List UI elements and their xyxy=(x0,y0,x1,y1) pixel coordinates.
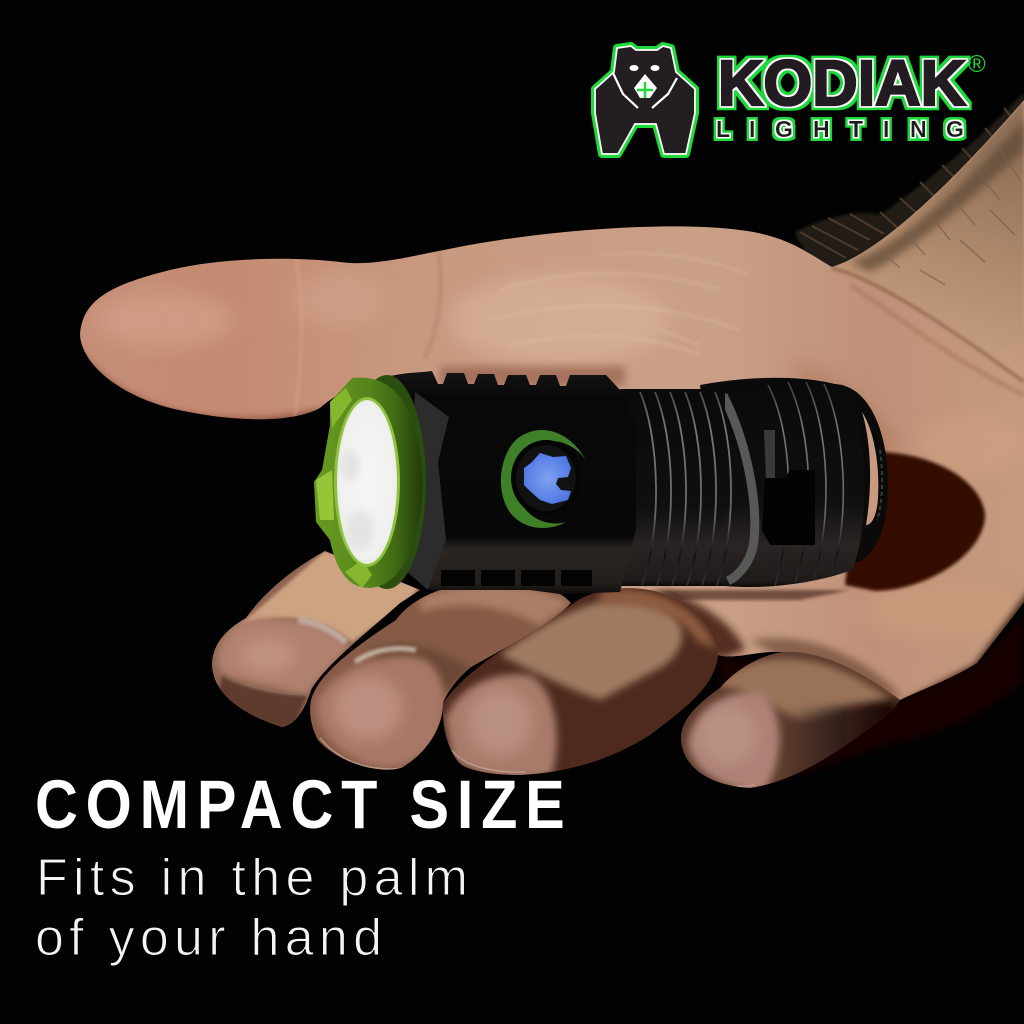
flashlight xyxy=(314,371,888,594)
heading: compact size: COMPACT SIZE xyxy=(35,766,565,843)
lower palm shading xyxy=(660,590,745,660)
hand shadow underlay xyxy=(718,615,1024,775)
bear eyes and snout xyxy=(630,65,638,71)
subheading text xyxy=(35,849,468,967)
bear face lines xyxy=(613,73,677,108)
finger: middle finger xyxy=(310,590,571,770)
green bezel xyxy=(314,375,426,589)
flashlight cast shadow xyxy=(845,452,985,591)
wrist crease xyxy=(832,268,1024,382)
finger: ring finger xyxy=(442,588,718,775)
tail ring xyxy=(830,384,888,565)
finger: little finger xyxy=(681,652,900,788)
logo wordmark KODIAK: KODIAK xyxy=(718,47,966,119)
logo bear emblem xyxy=(595,46,695,154)
photo: hand holding flashlight xyxy=(80,44,1024,788)
wrist hair fringe xyxy=(795,92,1024,270)
finger: index finger xyxy=(212,551,420,727)
palm creases and highlights xyxy=(450,275,670,365)
green switch ring xyxy=(501,430,587,528)
icon: blue bear xyxy=(524,453,571,504)
logo registered mark: ® xyxy=(968,51,986,78)
wrist skin xyxy=(834,100,1024,328)
subheading line 1: Fits in the palm xyxy=(36,849,468,907)
main body with finned top xyxy=(392,371,636,594)
subheading line 2: of your hand xyxy=(35,909,382,967)
tail head xyxy=(700,378,864,587)
lens xyxy=(334,397,400,567)
switch button xyxy=(501,430,587,528)
hand: thumb and palm xyxy=(80,100,1024,700)
wrist hairs xyxy=(880,150,1020,285)
logo: Kodiak Lighting xyxy=(595,46,986,154)
thumb shading xyxy=(84,350,322,419)
threaded barrel xyxy=(620,389,731,586)
logo wordmark LIGHTING: LIGHTING xyxy=(716,116,964,142)
